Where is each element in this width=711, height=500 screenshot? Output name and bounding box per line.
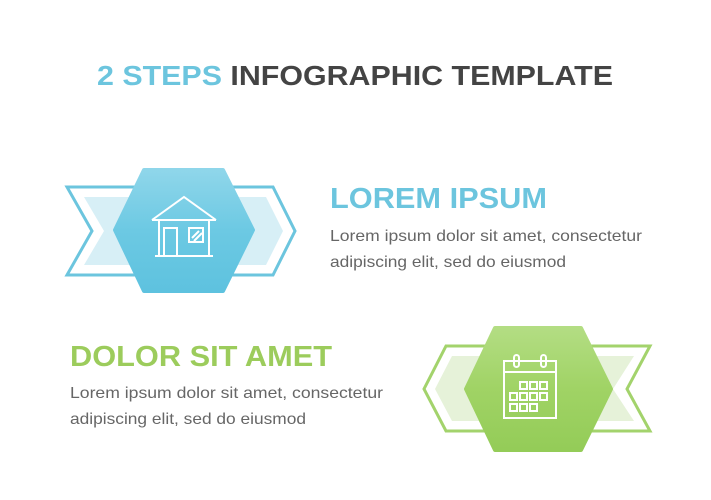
icon: calendar — [504, 355, 556, 418]
text block 2: adipiscing elit, sed do eiusmod — [70, 411, 306, 428]
chevron outline blue — [67, 187, 295, 275]
title: 2 STEPS INFOGRAPHIC TEMPLATE — [97, 60, 613, 91]
hexagon blue — [115, 170, 253, 291]
step 2 graphic — [424, 328, 650, 450]
heading: dolor sit amet: DOLOR SIT AMET — [70, 341, 332, 373]
chevron fill blue — [84, 197, 283, 265]
text block 2: Lorem ipsum dolor sit amet, consectetur — [70, 385, 384, 402]
text block 1 — [330, 228, 643, 271]
step 1 graphic — [67, 170, 295, 291]
heading: lorem ipsum: LOREM IPSUM — [330, 183, 547, 215]
chevron outline green — [424, 346, 650, 431]
chevron fill green — [435, 356, 634, 421]
text block 2 — [70, 385, 384, 428]
text block 1: adipiscing elit, sed do eiusmod — [330, 254, 566, 271]
hexagon green — [466, 328, 611, 450]
text block 1: Lorem ipsum dolor sit amet, consectetur — [330, 228, 643, 245]
icon: house — [152, 197, 216, 256]
